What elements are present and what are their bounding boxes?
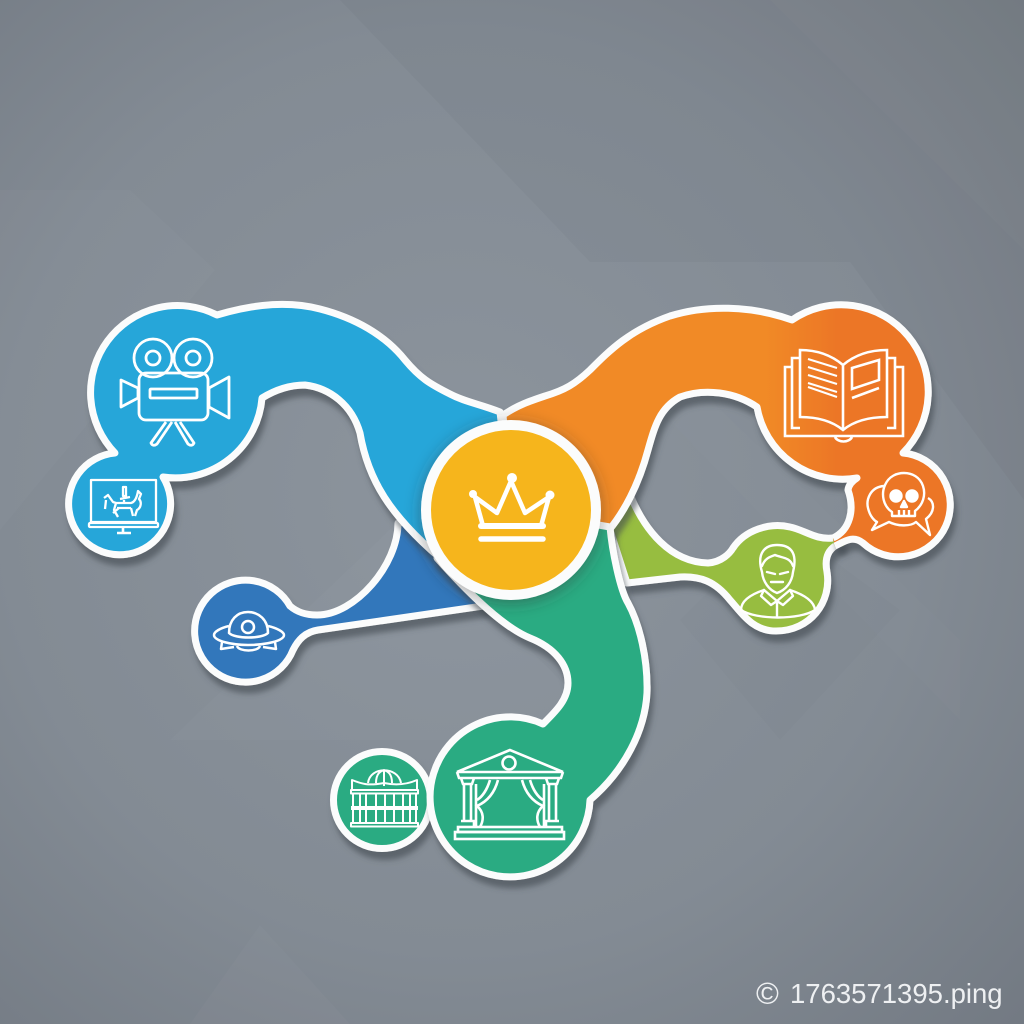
branch: orange with book and skull icons — [503, 305, 950, 570]
small circle: building — [334, 752, 430, 848]
branch: dark blue with saucer icon — [195, 510, 511, 682]
branch: blue with film camera and screen icons — [69, 304, 511, 558]
branch: green with theatre icon — [430, 510, 647, 877]
watermark: 1763571395.ping — [790, 978, 1003, 1009]
icon: monitor with horse rider — [89, 480, 158, 533]
watermark: © — [756, 976, 779, 1011]
icon: theatre stage — [455, 750, 564, 839]
icon: domed building — [351, 770, 418, 826]
branch: lime green with person icon — [600, 490, 844, 631]
icon: open book — [785, 350, 903, 442]
icon: flying saucer — [214, 612, 284, 650]
centre circle with crown — [426, 425, 596, 595]
icon: skull speech bubbles — [868, 473, 933, 535]
icon: film camera — [121, 339, 229, 445]
icon: person — [741, 545, 815, 618]
icon: crown — [469, 473, 554, 539]
